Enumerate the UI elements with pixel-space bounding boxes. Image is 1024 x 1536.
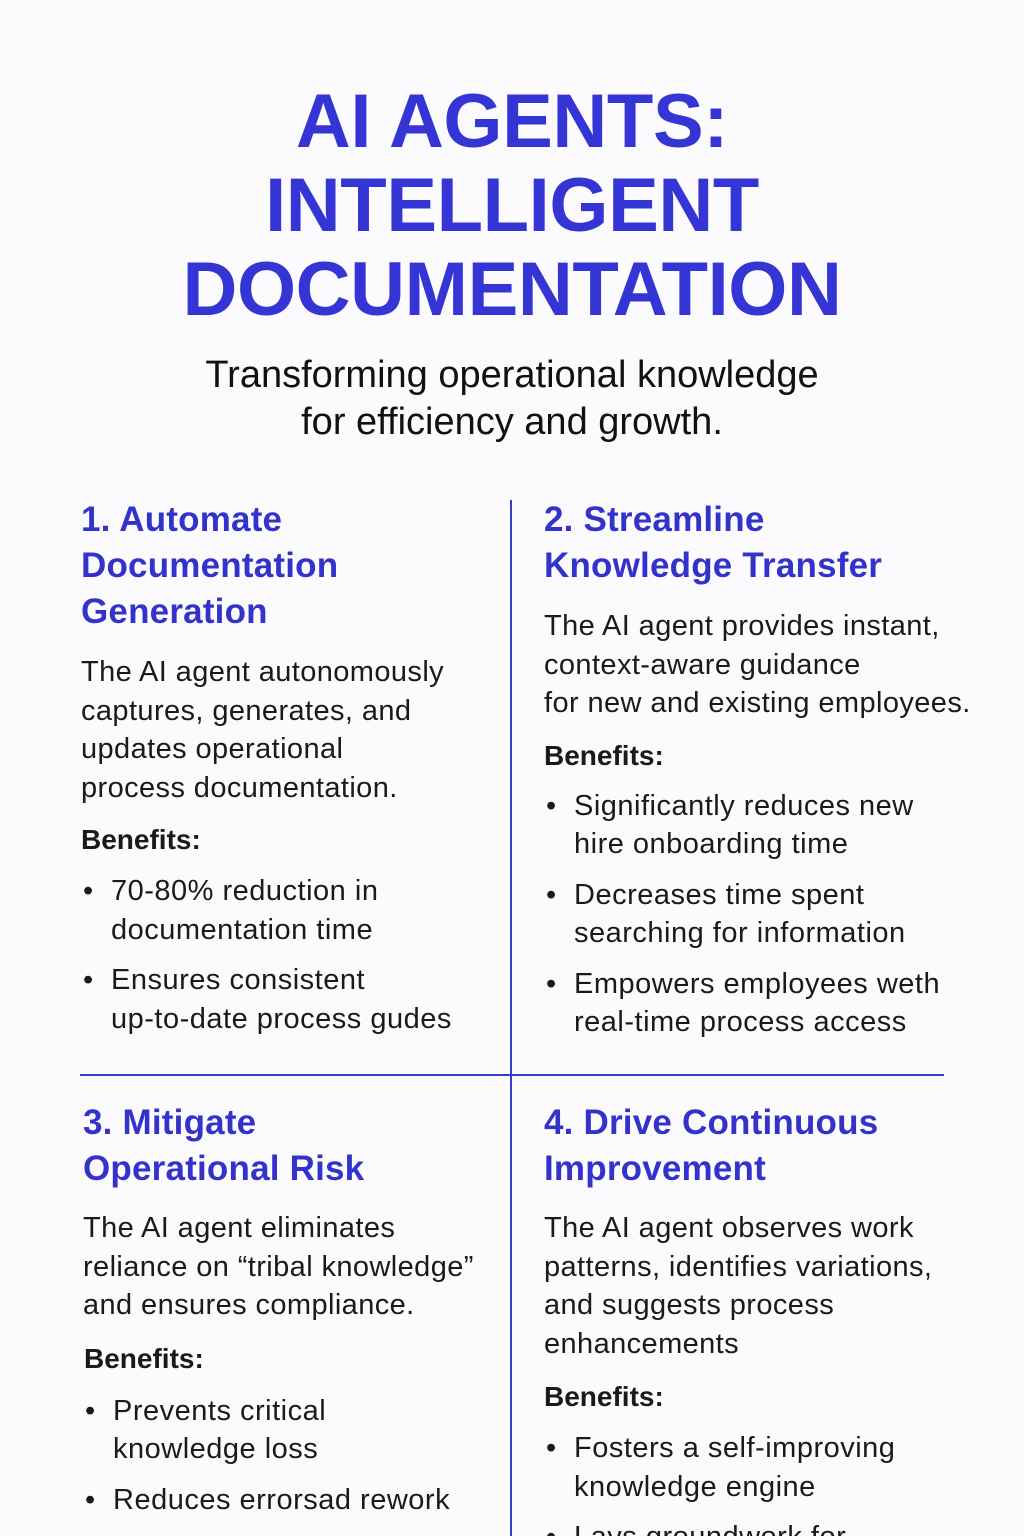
benefits label 2: Benefits:	[544, 740, 664, 771]
bullets 4	[547, 1432, 895, 1536]
bullets 2: Decreases time spent	[574, 879, 864, 911]
body 1: updates operational	[81, 733, 343, 765]
bullets 2: Significantly reduces new	[574, 790, 914, 822]
body 4: The AI agent observes work	[544, 1212, 914, 1244]
body 1	[81, 656, 444, 804]
bullets 2: hire onboarding time	[574, 828, 848, 860]
heading 1: Documentation	[81, 546, 338, 585]
panel: streamline knowledge transfer	[544, 500, 971, 1038]
heading 3	[83, 1103, 364, 1188]
bullets 2: real-time process access	[574, 1006, 907, 1038]
bullets 3	[86, 1395, 450, 1516]
body 2	[544, 610, 971, 719]
heading 4: Improvement	[544, 1149, 766, 1188]
bullets 2: Empowers employees weth	[574, 968, 940, 1000]
bullets 3: Reduces errorsad rework	[113, 1484, 450, 1516]
body 2: The AI agent provides instant,	[544, 610, 940, 642]
panel: mitigate operational risk	[83, 1103, 474, 1516]
body 4	[544, 1212, 932, 1360]
bullets 3: Prevents critical	[113, 1395, 326, 1427]
bullets 4: knowledge engine	[574, 1471, 816, 1503]
body 1: process documentation.	[81, 772, 398, 804]
body 2: context-aware guidance	[544, 649, 861, 681]
panel: drive continuous improvement	[544, 1103, 932, 1536]
subtitle	[205, 354, 819, 443]
heading 2: 2. Streamline	[544, 500, 764, 539]
body 3: The AI agent eliminates	[83, 1212, 395, 1244]
title	[182, 79, 842, 332]
benefits label 3: Benefits:	[84, 1343, 204, 1374]
horizontal divider	[80, 1074, 944, 1076]
panel: automate documentation	[81, 500, 452, 1035]
heading 1	[81, 500, 338, 631]
body 4: and suggests process	[544, 1289, 834, 1321]
body 3	[83, 1212, 474, 1321]
body 3: and ensures compliance.	[83, 1289, 415, 1321]
title: INTELLIGENT	[265, 163, 759, 248]
bullets 1: 70-80% reduction in	[111, 875, 378, 907]
heading 4: 4. Drive Continuous	[544, 1103, 878, 1142]
title: DOCUMENTATION	[182, 247, 842, 332]
benefits label 4: Benefits:	[544, 1381, 664, 1412]
body 4: enhancements	[544, 1328, 739, 1360]
bullets 3: knowledge loss	[113, 1433, 318, 1465]
body 1: captures, generates, and	[81, 695, 411, 727]
heading 3: 3. Mitigate	[83, 1103, 256, 1142]
subtitle: Transforming operational knowledge	[205, 354, 819, 396]
title: AI AGENTS:	[296, 79, 728, 164]
subtitle: for efficiency and growth.	[301, 401, 723, 443]
heading 1: 1. Automate	[81, 500, 282, 539]
vertical divider	[510, 500, 512, 1536]
heading 1: Generation	[81, 592, 268, 631]
heading 4	[544, 1103, 878, 1188]
heading 2	[544, 500, 882, 585]
body 4: patterns, identifies variations,	[544, 1251, 932, 1283]
body 1: The AI agent autonomously	[81, 656, 444, 688]
bullets 2: searching for information	[574, 917, 906, 949]
heading 2: Knowledge Transfer	[544, 546, 882, 585]
bullets 1	[84, 875, 452, 1035]
heading 3: Operational Risk	[83, 1149, 364, 1188]
bullets 1: Ensures consistent	[111, 964, 365, 996]
benefits label 1: Benefits:	[81, 824, 201, 855]
body 3: reliance on “tribal knowledge”	[83, 1251, 474, 1283]
body 2: for new and existing employees.	[544, 687, 971, 719]
bullets 1: up-to-date process gudes	[111, 1003, 452, 1035]
bullets 1: documentation time	[111, 914, 373, 946]
bullets 2	[547, 790, 940, 1038]
bullets 4: Fosters a self-improving	[574, 1432, 895, 1464]
